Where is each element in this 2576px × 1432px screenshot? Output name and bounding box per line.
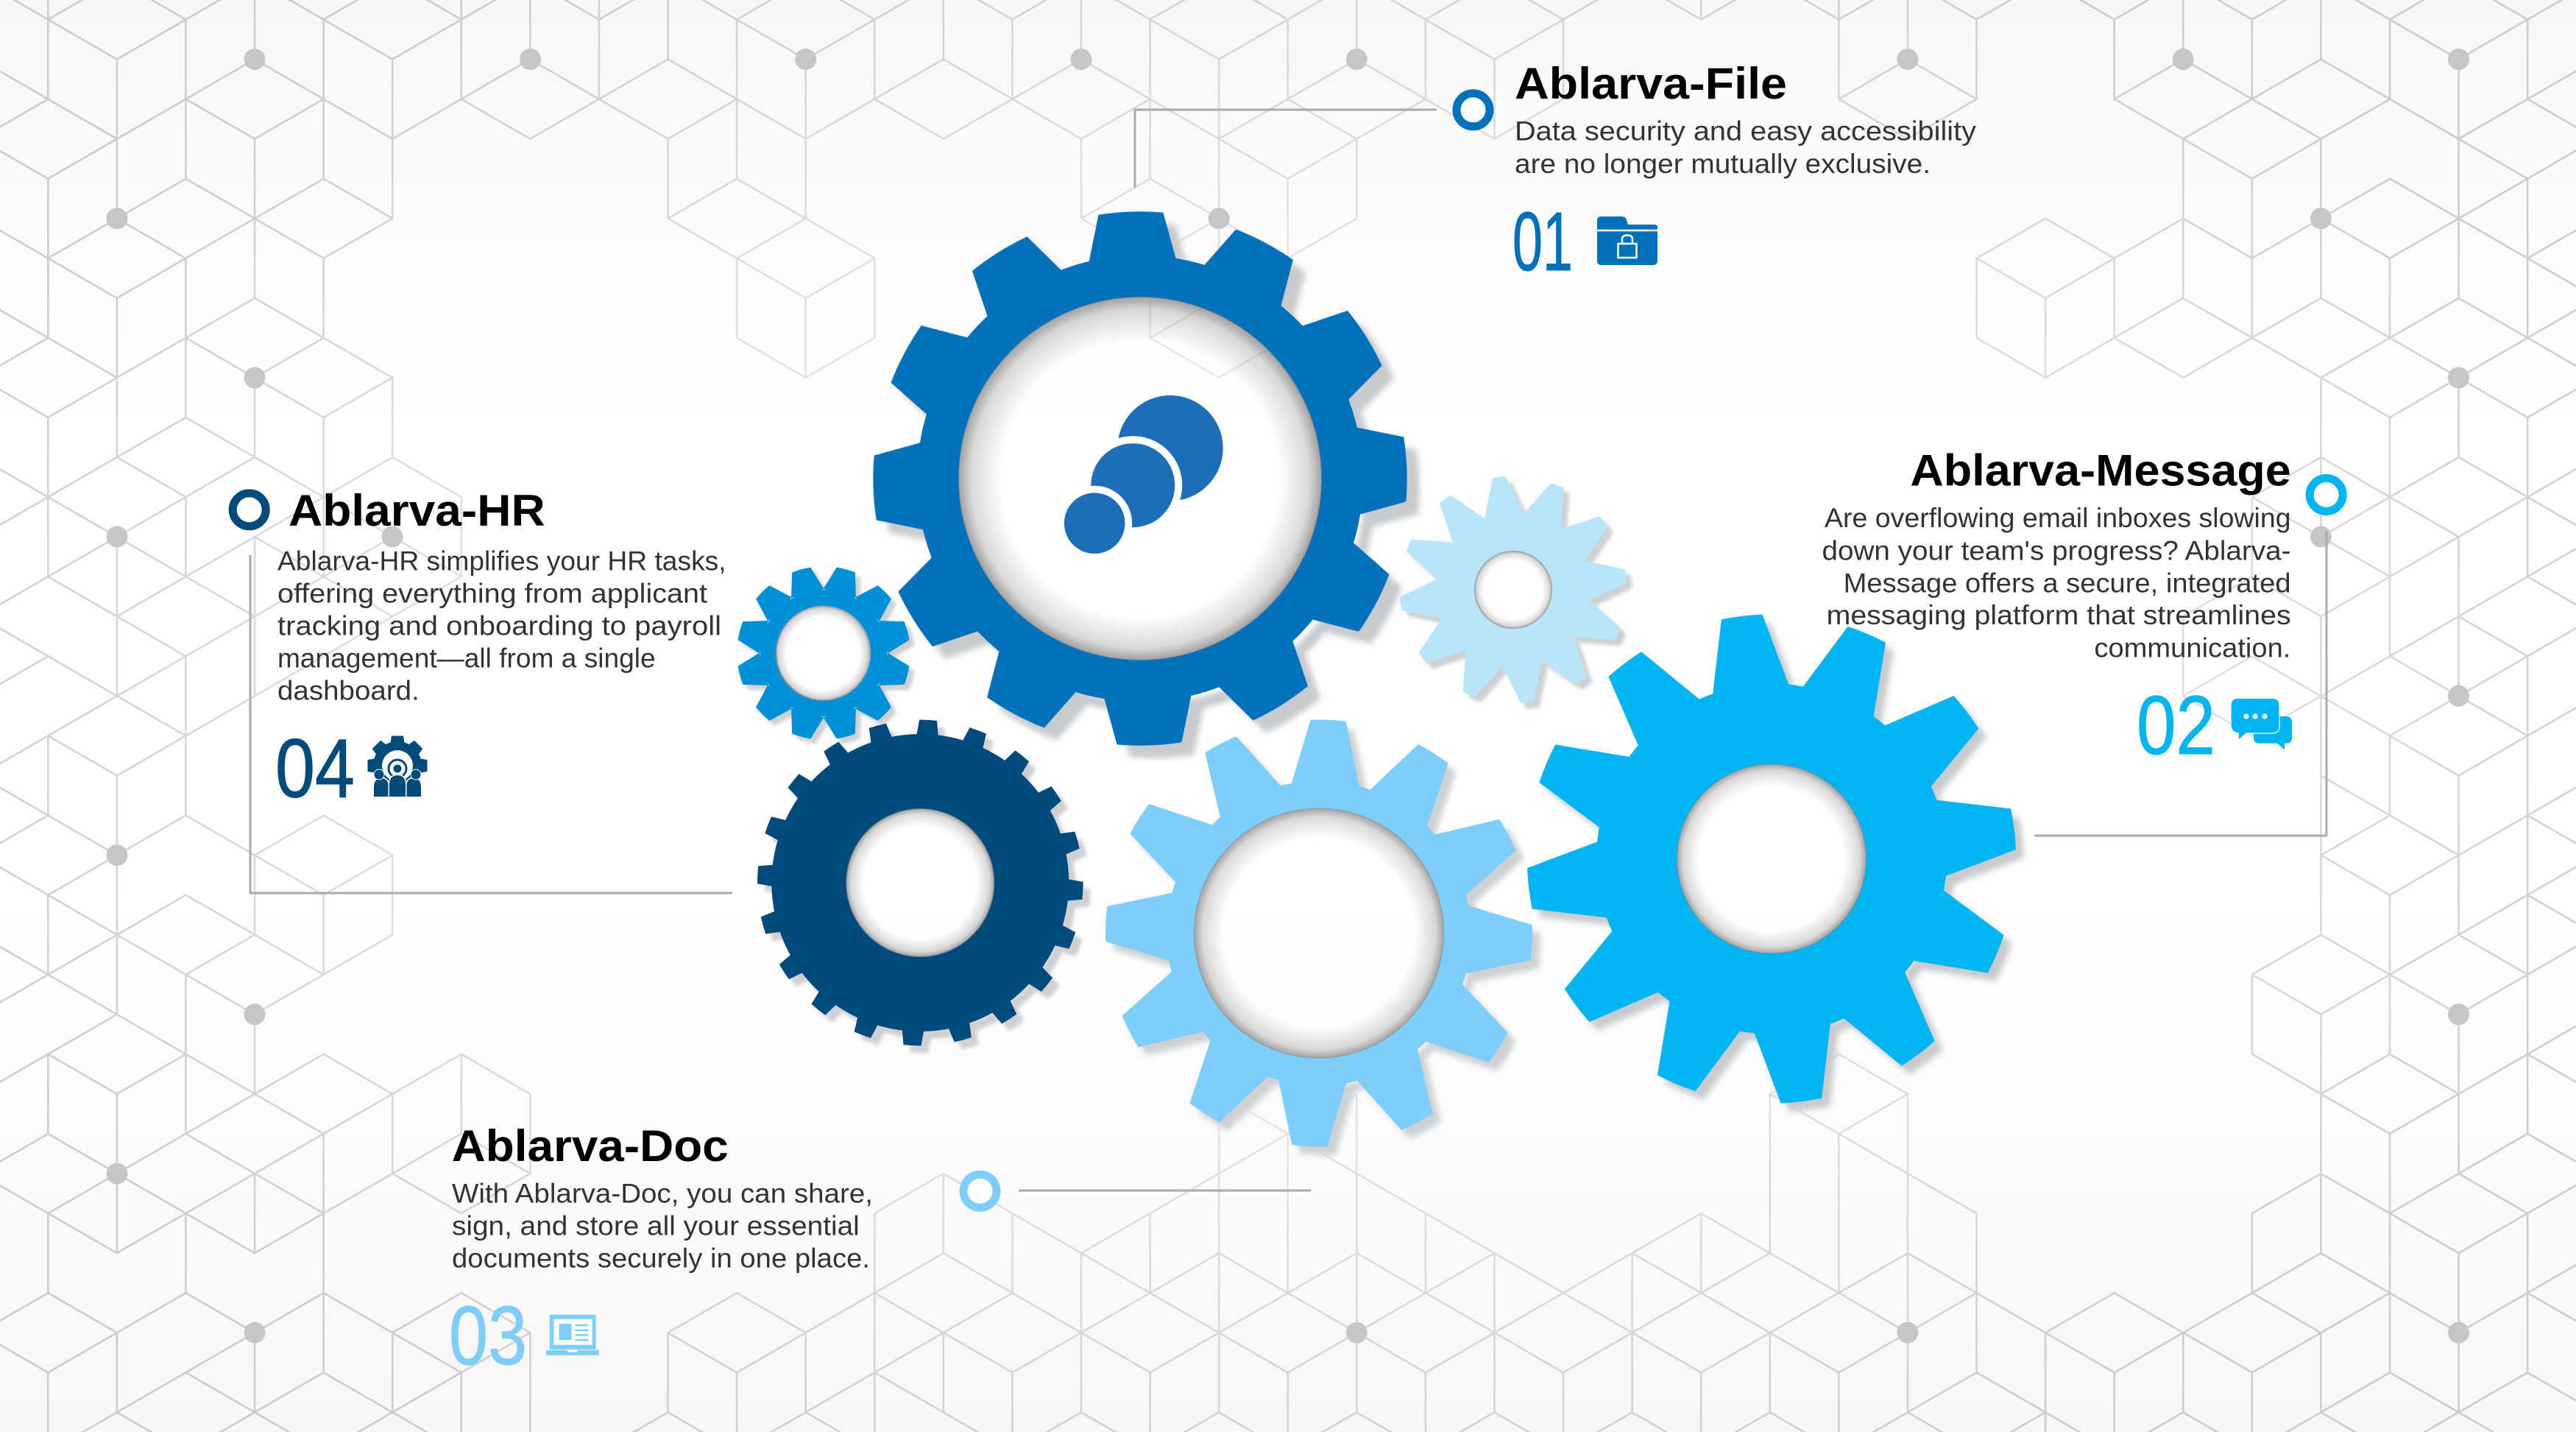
description: dashboard.	[277, 676, 420, 706]
marker ring	[963, 1174, 997, 1207]
number 03: 03	[449, 1289, 527, 1382]
description: Ablarva-HR simplifies your HR tasks,	[277, 546, 726, 576]
gear 2: cyan gear	[1499, 586, 2052, 1140]
heading: Ablarva-Message	[1910, 446, 2291, 495]
gear 5: small mid-blue gear	[718, 547, 935, 764]
description: management—all from a single	[277, 643, 656, 674]
gear 6: pale blue small gear	[1387, 463, 1646, 722]
panel: Ablarva-Message	[1822, 446, 2343, 772]
connector lines	[250, 110, 2326, 1191]
description: are no longer mutually exclusive.	[1515, 149, 1931, 179]
icon: locked folder	[1597, 216, 1657, 265]
description	[452, 1178, 873, 1274]
marker ring	[1457, 94, 1490, 127]
gear 4: dark navy gear	[749, 712, 1098, 1061]
panel: Ablarva-Doc	[449, 1121, 997, 1382]
icon: laptop with document	[546, 1315, 599, 1355]
panel: Ablarva-HR	[233, 486, 726, 814]
description: Are overflowing email inboxes slowing	[1825, 503, 2291, 533]
heading: Ablarva-File	[1515, 59, 1787, 108]
number 04: 04	[275, 722, 355, 814]
description: down your team's progress? Ablarva-	[1822, 536, 2290, 566]
icon: chat bubbles	[2232, 699, 2292, 750]
description: Data security and easy accessibility	[1515, 116, 1977, 147]
number 01: 01	[1512, 195, 1573, 288]
description: offering everything from applicant	[277, 579, 708, 609]
description	[1822, 503, 2291, 663]
description: With Ablarva-Doc, you can share,	[452, 1178, 873, 1208]
description	[277, 546, 726, 706]
description: documents securely in one place.	[452, 1244, 870, 1274]
panel: Ablarva-File	[1457, 59, 1977, 288]
description	[1515, 116, 1977, 179]
icon: team gear	[368, 736, 427, 797]
description: Message offers a secure, integrated	[1844, 568, 2291, 598]
heading: Ablarva-HR	[289, 486, 545, 535]
description: sign, and store all your essential	[452, 1210, 860, 1241]
description: messaging platform that streamlines	[1827, 600, 2291, 630]
marker ring	[2310, 479, 2343, 511]
number 02: 02	[2137, 679, 2215, 772]
marker ring	[233, 493, 266, 526]
icon: Ablarva logo circles	[1057, 395, 1223, 561]
gear 1: large central blue gear	[864, 202, 1429, 767]
description: communication.	[2094, 633, 2290, 663]
heading: Ablarva-Doc	[452, 1121, 729, 1171]
gear 3: light blue gear	[1097, 710, 1549, 1164]
description: tracking and onboarding to payroll	[277, 611, 721, 641]
